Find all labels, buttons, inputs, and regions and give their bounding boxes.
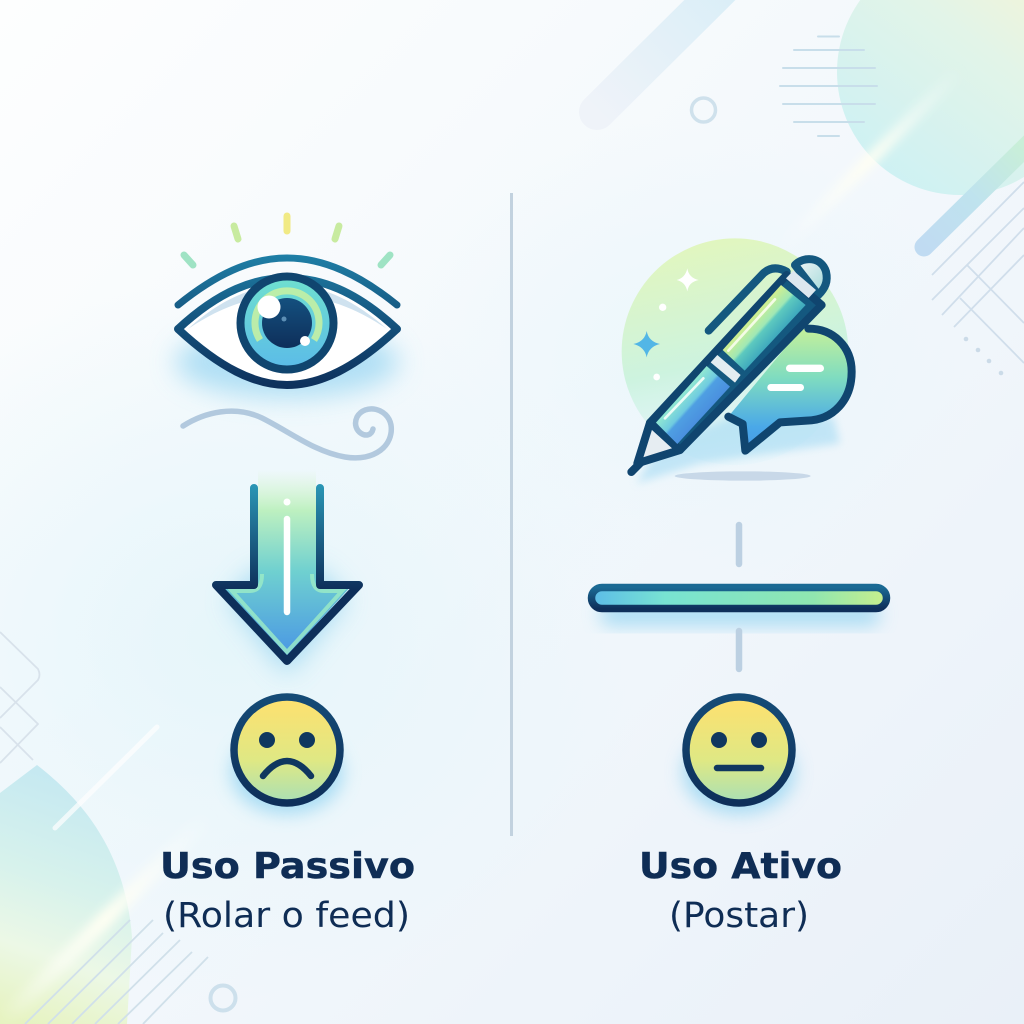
icon: flat bar — [592, 588, 886, 626]
decoration: small ring top — [692, 98, 716, 122]
decoration: light streak top right — [780, 70, 960, 250]
decoration: diagonal lines bottom left — [25, 920, 208, 1024]
arrow fill — [220, 470, 354, 656]
pen body — [650, 275, 822, 450]
iris light ring — [255, 291, 319, 340]
decoration: bottom left shape — [0, 765, 132, 1024]
icon: neutral face — [683, 697, 795, 814]
lower barrel — [656, 366, 730, 444]
iris — [240, 276, 334, 370]
connector top — [736, 525, 742, 564]
sparkles — [677, 268, 699, 291]
highlights — [258, 296, 280, 318]
pen nib stem — [631, 463, 641, 472]
icon: pen and speech bubble — [622, 238, 852, 483]
label: passive use — [160, 846, 415, 936]
center divider — [510, 193, 513, 836]
decoration: dots right — [964, 337, 1003, 375]
speech bubble — [728, 329, 852, 452]
pen clip — [709, 268, 787, 331]
middle band — [711, 355, 741, 383]
decoration: small ring bottom — [210, 986, 236, 1010]
backdrop circle — [622, 238, 848, 465]
arrow inner mint edge — [232, 574, 342, 652]
upper barrel — [723, 285, 806, 371]
label: active use — [639, 846, 842, 936]
arrow glow — [228, 570, 348, 675]
icon: sad face — [231, 697, 343, 814]
pupil — [262, 298, 312, 348]
arrow highlight — [284, 519, 290, 612]
subheading: Rolar o feed: (Rolar o feed) — [163, 896, 410, 936]
cap band — [786, 271, 816, 298]
icon: eye — [175, 216, 399, 398]
eyelid shade — [188, 285, 387, 329]
eyebrow — [178, 258, 397, 305]
eye rays — [184, 216, 390, 265]
icon: swirl line — [183, 409, 391, 458]
pen tip — [637, 423, 680, 463]
arrow outline — [216, 488, 359, 661]
upper barrel highlight — [728, 299, 775, 351]
decoration: horizontal lines top — [780, 36, 877, 136]
pen and bubble glow — [637, 417, 840, 483]
heading: Uso Passivo: Uso Passivo — [160, 846, 415, 887]
eye outline — [178, 278, 397, 385]
decoration: right diagonal bar — [924, 133, 1024, 247]
decoration: bottom left streak — [0, 727, 210, 1024]
lower barrel highlight — [665, 378, 703, 418]
eye glow — [175, 326, 399, 398]
decoration: top diagonal bar — [597, 0, 730, 112]
shadow ellipse — [675, 471, 811, 481]
pen cap — [795, 259, 827, 295]
subheading: Postar: (Postar) — [669, 896, 809, 936]
icon: down arrow — [216, 470, 359, 675]
bubble text lines — [786, 365, 824, 372]
heading: Uso Ativo: Uso Ativo — [639, 846, 842, 887]
decoration: grid lines right — [932, 182, 1024, 363]
decoration: diamonds left — [0, 632, 40, 763]
decoration: top right circle — [837, 0, 1024, 195]
connector bottom — [736, 631, 742, 669]
